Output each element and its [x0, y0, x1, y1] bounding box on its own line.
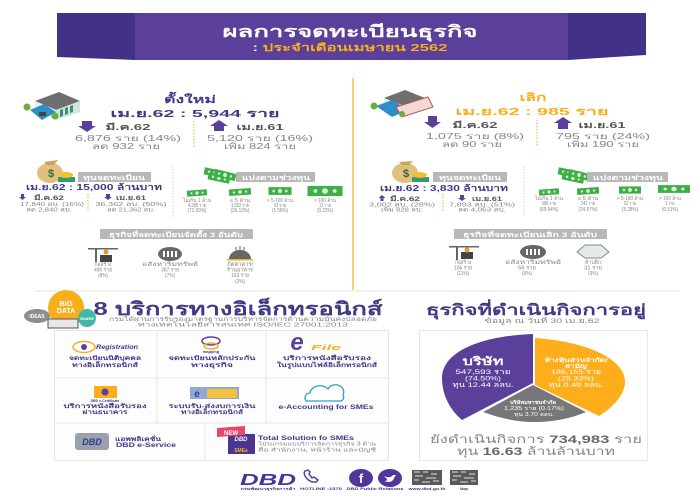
service: total solution: Total Solution fo SMEs: [258, 436, 355, 442]
panel: new capital: ลด 21,362 ลบ.: [107, 208, 156, 214]
service: registration: ทางอิเล็กทรอนิกส์: [72, 360, 139, 369]
panel: closed capital: 5 ราย: [666, 201, 675, 207]
service: e-filing: ทางอิเล็กทรอนิกส์: [181, 407, 244, 416]
panel: new capital: เม.ย.62 : 15,000 ล้านบาท: [26, 182, 163, 192]
service: mobile app: DBD: [82, 437, 102, 447]
capital bracket bills: [187, 186, 342, 197]
panel: new registrations: 5,120 ราย (16%): [207, 134, 314, 143]
icon: restaurant cloche: [227, 246, 253, 260]
service: registration: จดทะเบียนนิติบุคคล: [69, 354, 142, 362]
panel: new capital: 36,362 ลบ. (50%): [96, 202, 167, 208]
icon: money bag: [392, 161, 429, 183]
panel: closed capital: > 100 ล้าน: [659, 195, 682, 202]
icon: big data: SHARE: [80, 316, 94, 321]
pie chart: ทุน 3.70 ลลบ.: [514, 412, 554, 418]
panel: closed capital: เม.ย.61: [472, 196, 503, 203]
panel: top 3 new: 486 ราย: [94, 268, 112, 274]
icon: cash stack: [557, 167, 591, 184]
panel: top 3 closed: (11%): [457, 271, 469, 277]
service: total solution: [217, 426, 377, 454]
panel: closed capital: ทุนจดทะเบียน: [439, 174, 501, 182]
panel: closed capital: [369, 161, 690, 216]
icon: arrow up: [378, 195, 386, 201]
panel: top 3 new: ภัตตาคาร/: [227, 261, 253, 268]
panel: top 3 closed: (3%): [588, 271, 598, 277]
service: e-filing: [168, 387, 256, 416]
service: e-file: e: [290, 329, 304, 356]
panel: new registrations: มี.ค.62: [106, 122, 151, 132]
icon: facebook: f: [359, 471, 364, 486]
capital bracket bills: [539, 185, 690, 196]
panel: closed capital: 3,002 ลบ. (28%): [369, 202, 435, 208]
icon: twitter: [378, 469, 402, 487]
panel: new registrations: เม.ย.61: [236, 122, 284, 132]
panel: new capital: มี.ค.62: [34, 194, 65, 202]
panel: closed capital: เม.ย.62 : 3,830 ล้านบาท: [380, 183, 509, 193]
service: collateral: ทางธุรกิจ: [191, 361, 234, 369]
panel: top 3 new: ร้านอาหาร: [227, 266, 253, 274]
panel: top 3 new: 163 ราย: [231, 273, 249, 279]
panel: new registrations: 6,876 ราย (14%): [75, 134, 182, 143]
icon: big data: BIG: [59, 299, 73, 308]
panel: closed businesses: เลิก: [520, 92, 546, 104]
panel: new capital: (72.09%): [188, 208, 207, 214]
service: e-certificate: [64, 386, 147, 416]
service: e-certificate: บริการหนังสือรับรอง: [64, 402, 147, 410]
icon: money bag: $: [48, 168, 54, 180]
panel: closed capital: 242 ราย: [581, 201, 595, 207]
panel: new capital: ทุนจดทะเบียน: [83, 174, 145, 182]
panel: new capital: (1.56%): [272, 208, 288, 214]
QR code: website: [412, 470, 442, 485]
service: mobile app: [75, 433, 177, 450]
panel: active businesses: ยังดำเนินกิจการ 734,983 ราย: [430, 434, 642, 446]
service: e-file: File: [311, 345, 341, 352]
panel: new registrations: ลด 932 ราย: [92, 142, 160, 151]
icon: arrow down: [424, 116, 441, 128]
service: registration: Registration: [96, 345, 138, 351]
panel: closed capital: แบ่งตามช่วงทุน: [593, 174, 663, 182]
panel: closed capital: มี.ค.62: [390, 195, 421, 203]
panel: closed capital: > 5-100 ล้าน: [617, 195, 644, 202]
pie chart: ทุน 0.49 ลลบ.: [548, 382, 604, 389]
service: collateral: [168, 337, 256, 369]
pie chart: สามัญ: [565, 363, 587, 370]
QR code: map: [450, 470, 478, 485]
service: e-file: ในรูปแบบไฟล์อิเล็กทรอนิกส์: [277, 360, 378, 370]
pie chart: 1,235 ราย (0.17%): [504, 406, 564, 412]
panel: active businesses: ธุรกิจที่ดำเนินกิจการอยู่: [426, 299, 646, 320]
panel: e-services: 8 บริการทางอิเล็กทรอนิกส์: [94, 297, 384, 319]
panel: new capital: 17,840 ลบ. (16%): [20, 202, 84, 208]
service: e-accounting: [278, 385, 374, 411]
pie chart: ทุน 12.44 ลลบ.: [452, 382, 514, 389]
panel: new capital: > 5-100 ล้าน: [267, 197, 294, 204]
panel: top 3 closed: ธุรกิจที่จดทะเบียนเลิก 3 อันดับ: [463, 229, 597, 239]
panel: top 3 new: อสังหาริมทรัพย์: [142, 261, 198, 268]
icon: arrow down: [104, 194, 112, 200]
icon: arrow down: [78, 121, 96, 132]
panel: new registrations: เพิ่ม 824 ราย: [224, 140, 296, 151]
icon: closed building: [370, 90, 433, 117]
icon: arrow up: [210, 120, 228, 131]
panel: top 3 closed: ก่อสร้าง: [455, 259, 471, 266]
panel: closed capital: (69.64%): [540, 207, 559, 213]
footer: HOTLINE :1570: [300, 486, 343, 491]
icon: bank: [158, 247, 182, 261]
pie chart: บริษัท: [462, 355, 504, 368]
panel: closed capital: ≤ 5 ล้าน: [578, 195, 599, 202]
panel: top 3 closed: ค้าปลีก: [585, 259, 601, 266]
panel: closed capital: เพิ่ม 828 ลบ.: [381, 206, 424, 214]
panel: top 3 closed: (6%): [522, 271, 532, 277]
title banner: : ประจำเดือนเมษายน 2562: [252, 42, 448, 54]
panel: e-services: กรมได้ผ่านการรับรองมาตรฐานการบริหารจัดการด้านความมั่นคงปลอดภัย: [109, 315, 377, 323]
panel: closed businesses: เม.ย.61: [578, 120, 626, 130]
icon: office building: [24, 92, 80, 120]
panel: top 3 closed: 58 ราย: [518, 266, 536, 272]
panel: top 3 new: (8%): [98, 273, 108, 279]
service: mobile app: แอพพลิเคชั่น: [115, 434, 161, 443]
panel: closed businesses: ลด 90 ราย: [442, 140, 502, 149]
panel: new registrations: [24, 91, 314, 151]
panel: top 3 new: 387 ราย: [161, 268, 179, 274]
icon: phone: [304, 470, 318, 482]
panel: new capital: แบ่งตามช่วงทุน: [242, 174, 310, 182]
panel: active businesses: [420, 299, 648, 460]
service: e-file: [277, 329, 378, 370]
panel: closed businesses: 795 ราย (24%): [556, 132, 651, 141]
panel: new capital: (26.13%): [230, 208, 250, 214]
panel: top 3 closed: 31 ราย: [584, 266, 602, 272]
panel: e-services: [24, 290, 388, 460]
icon: construction: [449, 246, 479, 260]
icon: arrow down: [458, 195, 466, 201]
icon: big data: [24, 290, 96, 328]
title banner: ผลการจดทะเบียนธุรกิจ: [222, 22, 478, 42]
footer: www.dbd.go.th: [407, 486, 446, 491]
service: total solution: DBD: [234, 437, 248, 443]
panel: new capital: (0.22%): [317, 208, 333, 214]
panel: top 3 new: (3%): [235, 279, 245, 285]
service: mobile app: DBD e-Service: [116, 443, 177, 449]
icon: facebook: [349, 469, 373, 487]
footer: DBD Public Relations: [346, 486, 405, 491]
service: total solution: NEW: [224, 431, 238, 437]
service: e-filing: ระบบรับ-ส่งงบการเงิน: [168, 402, 256, 410]
panel: closed capital: 7,893 ลบ. (51%): [449, 202, 515, 208]
services table: [54, 330, 388, 460]
panel: closed capital: ไม่เกิน 1 ล้าน: [534, 195, 564, 202]
service: collateral: จดทะเบียนหลักประกัน: [168, 354, 256, 362]
pie chart: [442, 334, 625, 422]
panel: top 3 new: [88, 229, 253, 285]
panel: closed businesses: 1,075 ราย (8%): [426, 132, 525, 141]
panel: new registrations: เม.ย.62 : 5,944 ราย: [110, 108, 280, 120]
pie chart: (74.50%): [465, 376, 501, 382]
title banner: [57, 13, 646, 60]
service: collateral: mapping: [203, 349, 220, 354]
pie chart: ห้างหุ้นส่วนจำกัด/: [544, 356, 608, 364]
panel: closed businesses: [370, 90, 651, 149]
icon: big data: IDEAS: [29, 314, 45, 320]
pie chart: 186,155 ราย: [551, 369, 601, 376]
panel: closed capital: (5.28%): [622, 207, 638, 213]
service: registration: [69, 342, 142, 369]
service: total solution: คือ สำนักงาน, หน้าร้าน และบัญชี: [258, 446, 377, 454]
panel: top 3 closed: 106 ราย: [454, 266, 472, 272]
icon: market umbrella: [577, 245, 609, 258]
panel: new capital: ≤ 5 ล้าน: [230, 197, 251, 204]
panel: closed businesses: เพิ่ม 190 ราย: [567, 138, 639, 149]
icon: arrow up: [554, 117, 572, 129]
icon: bank: [520, 245, 546, 259]
logo: DBD: DBD: [240, 472, 297, 489]
panel: new capital: 93 ราย: [274, 203, 286, 209]
panel: top 3 new: ธุรกิจที่จดทะเบียนจัดตั้ง 3 อันดับ: [109, 229, 243, 239]
service: e-certificate: ผ่านธนาคาร: [82, 409, 129, 416]
panel: active businesses: ทุน 16.63 ล้านล้านบาท: [457, 446, 615, 458]
icon: construction: [88, 248, 118, 262]
panel: new registrations: ตั้งใหม่: [164, 91, 216, 106]
panel: top 3 new: ก่อสร้าง: [94, 261, 112, 268]
pie chart: (25.33%): [558, 376, 594, 382]
icon: big data: DATA: [57, 308, 75, 315]
service: e-accounting: e-Accounting for SMEs: [278, 405, 374, 411]
panel: new capital: 4,285 ราย: [188, 203, 206, 209]
panel: active businesses: ข้อมูล ณ วันที่ 30 เม.ย.62: [484, 316, 600, 325]
icon: cash stack: [203, 167, 237, 184]
footer: Map: [460, 486, 469, 491]
panel: closed businesses: มี.ค.62: [452, 120, 498, 130]
panel: closed capital: (0.51%): [662, 207, 678, 213]
service: e-certificate: DBD e-Certificate: [91, 399, 119, 403]
service: e-file: บริการหนังสือรับรอง: [283, 354, 371, 362]
panel: new capital: ลด 2,840 ลบ.: [26, 208, 73, 214]
icon: money bag: [37, 160, 75, 183]
service: total solution: SMEs: [234, 448, 248, 454]
logo: DBD: [240, 472, 297, 492]
panel: closed businesses: เม.ย.62 : 985 ราย: [456, 106, 608, 118]
panel: top 3 closed: อสังหาริมทรัพย์: [505, 259, 561, 266]
service: total solution: โปรแกรมแบบริการจัดการธุรกิจ 3 ด้าน: [258, 440, 377, 448]
panel: closed capital: ลด 4,063 ลบ.: [458, 208, 507, 214]
logo: DBD: กรมพัฒนาธุรกิจการค้า: [240, 486, 296, 492]
panel: new capital: > 100 ล้าน: [314, 197, 337, 204]
panel: new capital: [19, 160, 342, 218]
pie chart: 547,593 ราย: [456, 369, 511, 376]
panel: e-services: ทางเทคโนโลยีสารสนเทศ ISO/IEC 27001:2013: [138, 320, 348, 328]
footer: [240, 469, 478, 492]
panel: new capital: 1,553 ราย: [231, 203, 249, 209]
icon: arrow down: [19, 194, 26, 200]
service: e-filing: e: [194, 389, 200, 400]
panel: top 3 new: (7%): [165, 273, 175, 279]
panel: closed capital: 52 ราย: [624, 201, 636, 207]
panel: new capital: ไม่เกิน 1 ล้าน: [182, 197, 212, 204]
panel: new capital: เม.ย.61: [116, 195, 147, 202]
icon: money bag: $: [403, 168, 409, 180]
pie chart: บริษัทมหาชนจำกัด: [510, 399, 556, 406]
panel: top 3 closed: [449, 229, 609, 277]
panel: closed capital: 686 ราย: [542, 201, 556, 207]
panel: new capital: 13 ราย: [319, 203, 331, 209]
panel: closed capital: (24.57%): [578, 207, 598, 213]
